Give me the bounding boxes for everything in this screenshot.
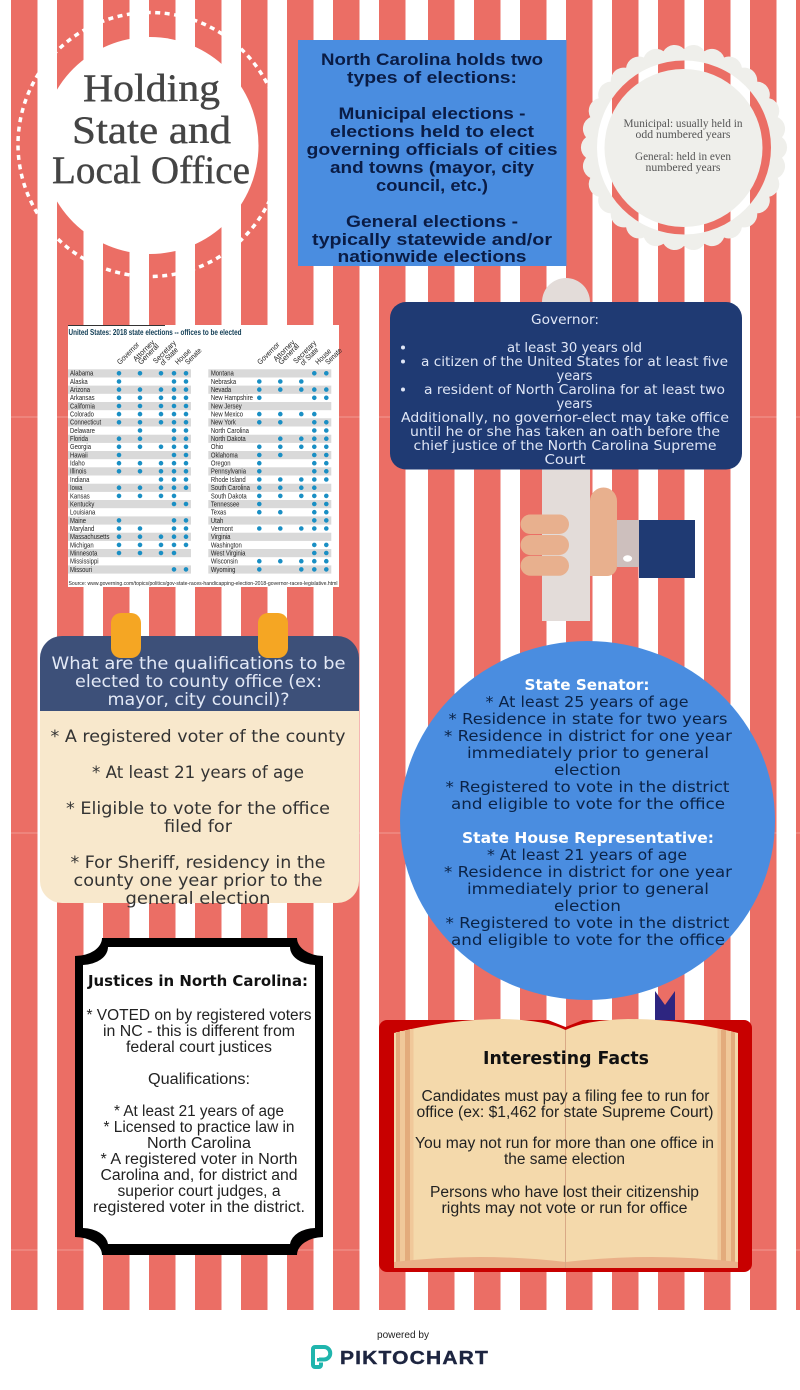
title badge [18,12,282,276]
justices text: federal court justices [126,1039,272,1056]
state house heading: State House Representative: [462,829,714,847]
right state rows: Texas [211,509,227,517]
title: Holding [83,67,220,110]
left state rows: Massachusetts [70,534,110,541]
page edges [396,1029,735,1264]
left column headers: Secretary [151,338,178,365]
governor text: a citizen of the United States for at least five [421,354,728,370]
title: Local Office [52,149,250,192]
red book cover [379,1020,752,1272]
right state rows [208,369,331,574]
seal inner disc [604,69,762,227]
seal text [624,118,743,174]
governor text: a resident of North Carolina for at least two [424,382,725,398]
justices text: * A registered voter in North [100,1151,298,1168]
state senator list: * Registered to vote in the district [446,778,730,796]
right state rows: Wisconsin [211,558,238,566]
justices text: * VOTED on by registered voters [86,1007,312,1024]
governor text: years [556,368,592,384]
governor text: Governor: [531,312,599,328]
right state rows: Oklahoma [211,452,238,460]
right state rows: Nebraska [211,378,236,386]
state senator list: * Residence in state for two years [448,710,728,728]
governor text [401,312,729,468]
left state rows: Georgia [70,444,91,451]
right column headers: Senate [323,346,344,366]
justices text [86,1007,312,1216]
state house list: * Registered to vote in the district [446,914,730,932]
left state rows: California [70,403,95,411]
right column headers: General [276,341,301,366]
left state rows: Colorado [70,411,94,419]
right state rows: Tennessee [211,501,240,509]
state house list: election [554,897,621,915]
election types text: council, etc.) [376,176,488,195]
right state rows: South Dakota [211,493,247,501]
justices text: * At least 21 years of age [114,1103,284,1120]
blue ellipse [400,641,775,1000]
panel: governor qualifications [390,302,742,470]
left state rows: Illinois [70,468,87,476]
seal text: Municipal: usually held in [624,118,743,130]
left column headers [115,338,204,367]
spine line [565,1030,566,1268]
panel: 2018 state elections table [68,325,344,587]
title [52,67,250,192]
governor text: until he or she has taken an oath before the [410,424,720,440]
book pages [394,1019,738,1268]
election types text: and towns (mayor, city [330,158,535,177]
scalloped seal ring [581,45,787,250]
county question heading: What are the qualifications to be [52,654,346,674]
election types text: typically statewide and/or [312,230,552,249]
state house list: * Residence in district for one year [444,863,733,881]
black ticket frame [75,938,323,1255]
state senator list [444,693,733,813]
left state rows: Kansas [70,493,90,501]
right state rows: North Dakota [211,436,246,443]
right column headers: Governor [255,340,282,366]
facts text: Candidates must pay a filing fee to run for [422,1088,710,1105]
left state rows: Louisiana [70,509,96,517]
left state rows: Mississippi [70,558,99,566]
right state rows: Virginia [211,534,231,541]
election types text: North Carolina holds two [321,50,543,69]
left column headers: General [136,341,161,366]
right state rows: Nevada [211,386,231,394]
left state rows: Kentucky [70,501,95,509]
justices text: Qualifications: [148,1071,250,1088]
election types text: governing officials of cities [306,140,558,159]
left state rows: Delaware [70,427,95,435]
right column headers: Attorney [271,338,297,363]
left state rows: Hawaii [70,452,88,460]
facts text: rights may not vote or run for office [442,1200,688,1217]
left state rows: Maryland [70,525,95,533]
cuff button [623,555,632,562]
table top rule [68,325,165,326]
left state rows: Idaho [70,460,85,468]
state senator list: * At least 25 years of age [486,693,688,711]
left column headers: House [173,347,193,366]
election types text: types of elections: [347,68,517,87]
page bottom shading [394,1257,738,1268]
table background [68,325,339,587]
justices text: North Carolina [147,1135,251,1152]
panel: types of elections [298,40,566,266]
facts text: You may not run for more than one office in [415,1135,714,1152]
footer: powered by piktochart [313,1329,489,1368]
right state rows: New York [211,419,236,427]
right state rows: New Hampshire [211,395,253,402]
state senator heading: State Senator: [524,676,650,694]
county qualifications list: * Eligible to vote for the office [66,799,330,819]
county qualifications list: general election [126,889,270,909]
right column headers: Secretary [291,338,318,365]
left state rows: Missouri [70,566,92,574]
election types text: elections held to elect [330,122,534,141]
navy panel background [390,302,742,470]
calendar pin right [258,613,288,658]
right state rows: Montana [211,370,234,378]
left column headers: of State [158,345,180,367]
justices text: * Licensed to practice law in [104,1119,294,1136]
right column headers: House [313,347,333,366]
right state rows: Utah [211,517,224,525]
right state rows: West Virginia [211,550,246,558]
jacket sleeve [639,520,695,578]
illustration: hand holding a scroll [520,278,695,621]
left state rows: Minnesota [70,550,98,558]
right state rows: Oregon [211,460,231,468]
scroll [542,278,590,621]
table title: United States: 2018 state elections -- offices to be elected [68,327,242,337]
county qualifications list: * For Sheriff, residency in the [70,853,326,873]
right state rows: Pennsylvania [211,468,246,476]
county qualifications list: county one year prior to the [74,871,322,891]
state senator list: immediately prior to general [467,744,709,762]
left column headers: Governor [115,340,142,366]
panel: interesting facts book [379,991,752,1272]
left state rows: Alabama [70,370,94,378]
left state rows: Connecticut [70,419,101,427]
cream calendar body [40,700,359,903]
left column headers: Attorney [131,338,157,363]
panel: county office qualifications [40,613,359,909]
justices text: Carolina and, for district and [100,1167,298,1184]
state senator list: * Residence in district for one year [444,727,733,745]
governor text: Court [544,452,586,468]
panel: election timing seal [581,45,787,250]
facts text: Persons who have lost their citizenship [430,1184,699,1201]
state house list: and eligible to vote for the office [451,931,725,949]
bookmark [655,991,675,1022]
calendar pin left [111,613,141,658]
county qualifications list [50,727,346,909]
fingers [520,514,569,576]
election types text: nationwide elections [338,247,526,266]
right state rows: Vermont [211,525,233,533]
shirt cuff [617,520,639,567]
left state rows: Michigan [70,542,94,550]
white ticket interior [83,947,315,1244]
left state rows: Indiana [70,476,90,484]
election types text [306,50,558,266]
left state rows [68,369,191,574]
left state rows: Florida [70,436,88,443]
table source note: Source: www.governing.com/topics/politics/gov-state-races-handicapping-election-2018-governor-races-legislative.html [68,581,338,587]
left column headers: Senate [183,346,204,366]
right state rows: Ohio [211,444,224,451]
bullets [401,346,405,392]
dashed ring [18,12,282,276]
county qualifications list: * At least 21 years of age [92,763,304,783]
right state rows: North Carolina [211,427,249,435]
seal text: numbered years [646,162,721,174]
title: State and [72,109,232,152]
right state rows: Washington [211,542,242,550]
county question heading: mayor, city council)? [108,690,290,710]
calendar header [40,636,359,711]
justices text: in NC - this is different from [103,1023,295,1040]
justices heading: Justices in North Carolina: [87,972,308,990]
powered by text: powered by [377,1329,430,1341]
panel: state legislators qualifications [400,641,775,1000]
right state rows: Wyoming [211,566,236,574]
governor text: at least 30 years old [507,340,642,356]
right state rows: Rhode Island [211,476,246,484]
state house list: * At least 21 years of age [487,846,687,864]
county qualifications list: * A registered voter of the county [50,727,346,747]
governor text: Additionally, no governor-elect may take office [401,410,729,426]
thumb [590,488,617,576]
facts text [415,1088,714,1217]
left state rows: Iowa [70,485,83,492]
facts heading: Interesting Facts [483,1048,649,1069]
county qualifications list: filed for [164,817,232,837]
state senator list: election [554,761,621,779]
state house list [444,846,733,949]
right column headers [255,338,344,367]
governor text: chief justice of the North Carolina Supreme [414,438,716,454]
panel: justices ticket [75,938,323,1255]
county question heading: elected to county office (ex: [75,672,322,692]
justices text: registered voter in the district. [93,1199,305,1216]
white title circle [42,37,258,254]
piktochart logo icon [313,1347,330,1367]
left state rows: Alaska [70,378,88,386]
right column headers: of State [298,345,320,367]
piktochart wordmark: PIKTOCHART [340,1348,489,1368]
governor text: years [556,396,592,412]
facts text: office (ex: $1,462 for state Supreme Court) [416,1104,714,1121]
seal text: odd numbered years [636,129,731,141]
right state rows: New Jersey [211,403,242,411]
election types text: General elections - [346,212,518,231]
right state rows: South Carolina [211,485,250,492]
state senator list: and eligible to vote for the office [451,795,725,813]
seal text: General: held in even [635,151,731,163]
county question heading [52,654,346,710]
left state rows: Maine [70,517,86,525]
facts text: the same election [504,1151,625,1168]
state house list: immediately prior to general [467,880,709,898]
blue panel background [298,40,566,266]
election types text: Municipal elections - [338,104,526,123]
left state rows: Arizona [70,386,90,394]
justices text: superior court judges, a [118,1183,281,1200]
left state rows: Arkansas [70,395,95,402]
right state rows: New Mexico [211,411,243,419]
